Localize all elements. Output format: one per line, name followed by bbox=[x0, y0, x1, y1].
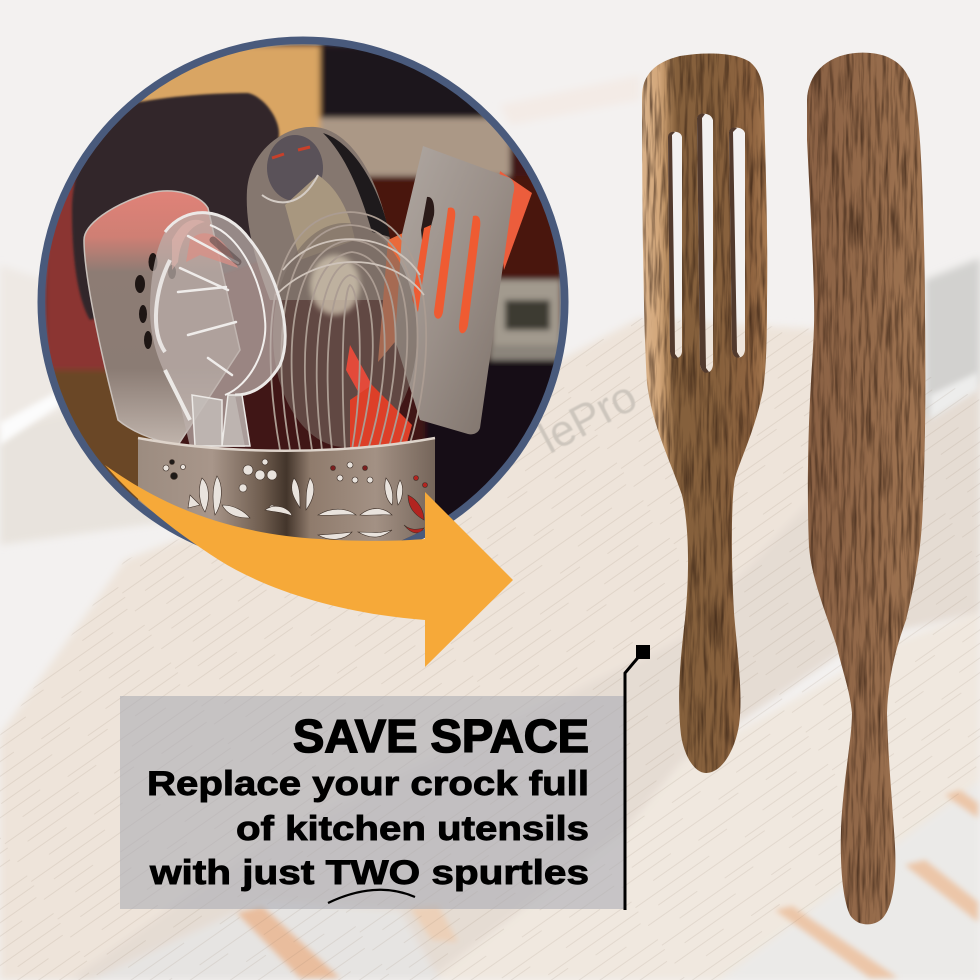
body line 3: with just TWO spurtles bbox=[149, 854, 589, 892]
slot inner walls bbox=[668, 114, 740, 373]
diagonal wood grain bbox=[0, 318, 980, 980]
wire whisk bbox=[271, 212, 426, 450]
curved orange arrow bbox=[105, 465, 513, 667]
left steel slotted turner bbox=[84, 191, 240, 445]
clear plastic spoon bbox=[150, 213, 285, 447]
orange spatula behind bbox=[496, 171, 532, 270]
left spurtle with three slots bbox=[642, 54, 767, 773]
body line 2: of kitchen utensils bbox=[236, 810, 589, 848]
hand-drawn underline under TWO bbox=[328, 890, 415, 903]
turner holes bbox=[135, 253, 176, 349]
black spatula bbox=[72, 93, 279, 320]
text block: save space bbox=[147, 710, 589, 892]
engraved logo text on blurred spurtle: lePro bbox=[531, 372, 645, 463]
right steel slotted turner bbox=[395, 146, 514, 434]
callout leader line bbox=[625, 645, 650, 910]
steel serving spoon bbox=[247, 127, 390, 300]
photo backdrop bbox=[45, 45, 561, 561]
right solid spurtle bbox=[807, 53, 925, 924]
crock band bbox=[138, 439, 435, 541]
heading: SAVE SPACE bbox=[293, 710, 589, 762]
text panel backdrop bbox=[120, 696, 625, 909]
body line 1: Replace your crock full bbox=[147, 765, 589, 803]
turner slots bbox=[412, 197, 480, 333]
photo circle: crock of kitchen utensils bbox=[42, 41, 564, 563]
crock cut-out pattern bbox=[163, 459, 428, 539]
